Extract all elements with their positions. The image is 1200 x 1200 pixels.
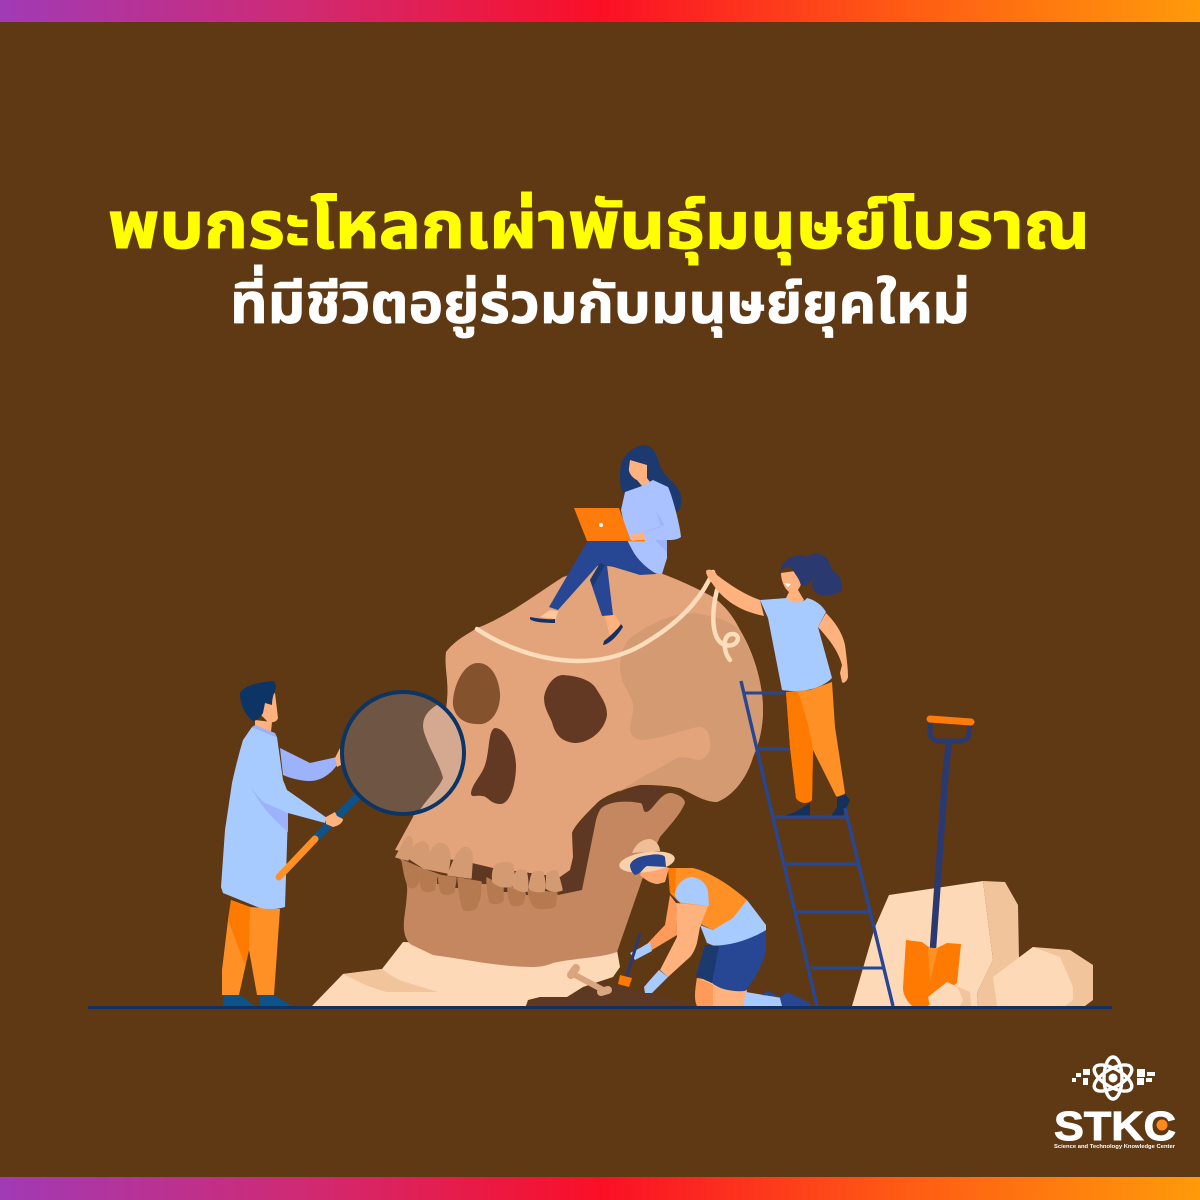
hands: [326, 748, 343, 827]
shoes: [223, 995, 292, 1006]
shorts: [696, 930, 766, 991]
scientist with magnifying glass: [221, 681, 475, 1006]
neck and face: [255, 693, 278, 732]
hair: [240, 681, 276, 721]
atom icon: [1090, 1057, 1136, 1099]
lower jaw: [400, 793, 685, 967]
front arm: [660, 903, 708, 977]
neck and face: [781, 570, 804, 604]
nose cavity: [471, 728, 516, 804]
face: [629, 460, 650, 486]
glove 1: [630, 942, 652, 960]
collar: [252, 725, 277, 737]
sweater: [621, 480, 681, 574]
back arm: [648, 895, 677, 950]
logo tagline: Science and Technology Knowledge Center: [1054, 1144, 1176, 1150]
smile: [784, 583, 791, 587]
vest: [668, 868, 747, 930]
right leg: [549, 542, 657, 610]
grip bar: [930, 719, 971, 722]
ladder: [741, 681, 893, 1006]
illustration: skull: [395, 565, 763, 967]
grip frame: [930, 724, 970, 741]
bottom gradient bar: [0, 1177, 1200, 1200]
sleeve: [675, 877, 709, 906]
left leg: [590, 563, 613, 616]
woman sitting with laptop: [530, 445, 681, 645]
rope over skull: [477, 572, 738, 661]
face: [640, 865, 669, 884]
hair: [630, 854, 666, 875]
hair: [620, 445, 681, 512]
upper teeth: [396, 837, 562, 892]
hand: [630, 532, 645, 541]
shirt bottom: [700, 900, 766, 947]
top gradient bar: [0, 0, 1200, 22]
coat: [221, 727, 327, 909]
glove 2: [644, 970, 668, 993]
sock: [743, 992, 782, 1006]
logo: STKC: [1054, 1057, 1176, 1150]
eye socket left: [453, 663, 500, 724]
laptop: [574, 508, 645, 542]
bone: [571, 968, 608, 992]
cranium shaded patch: [617, 613, 763, 802]
hair: [780, 555, 813, 586]
rock small: [928, 982, 971, 1006]
back arm: [280, 748, 337, 781]
pants: [222, 900, 280, 995]
brush tool: [618, 934, 640, 987]
dark slots between teeth: [437, 862, 530, 895]
shirt: [760, 598, 832, 691]
magnifier handle: [316, 796, 358, 838]
shovel: [903, 719, 971, 1006]
ponytail: [808, 553, 842, 595]
magnifier lens: [342, 690, 475, 815]
knee leg: [695, 978, 747, 1006]
handle: [933, 741, 949, 948]
orange dot: [1156, 1120, 1168, 1130]
blade: [903, 940, 961, 1006]
coat shade: [245, 767, 288, 832]
digger with hat: [618, 839, 810, 1006]
eye socket right: [544, 675, 607, 743]
hat: [618, 839, 676, 876]
dirt mound: [526, 982, 690, 1006]
cranium: [395, 565, 763, 877]
logo wordmark: STKC: [1054, 1103, 1176, 1149]
back arm: [818, 613, 848, 683]
title line 1: พบกระโหลกเผ่าพันธุ์มนุษย์โบราณ: [108, 188, 1090, 265]
woman on ladder: [706, 553, 850, 816]
reaching arm: [706, 570, 764, 616]
rock right: [993, 947, 1093, 1006]
ground line: [88, 1006, 1112, 1009]
title line 2: ที่มีชีวิตอยู่ร่วมกับมนุษย์ยุคใหม่: [230, 264, 970, 338]
lower teeth: [402, 860, 557, 910]
pants: [786, 682, 845, 803]
rock large: [852, 881, 1019, 1006]
shoes: [762, 991, 810, 1006]
dark gap behind jaw: [450, 786, 665, 900]
pixel dots: [1072, 1069, 1155, 1085]
shoes: [785, 794, 850, 816]
illustration: sand base under skull: [312, 942, 620, 1006]
feet: [540, 610, 558, 619]
